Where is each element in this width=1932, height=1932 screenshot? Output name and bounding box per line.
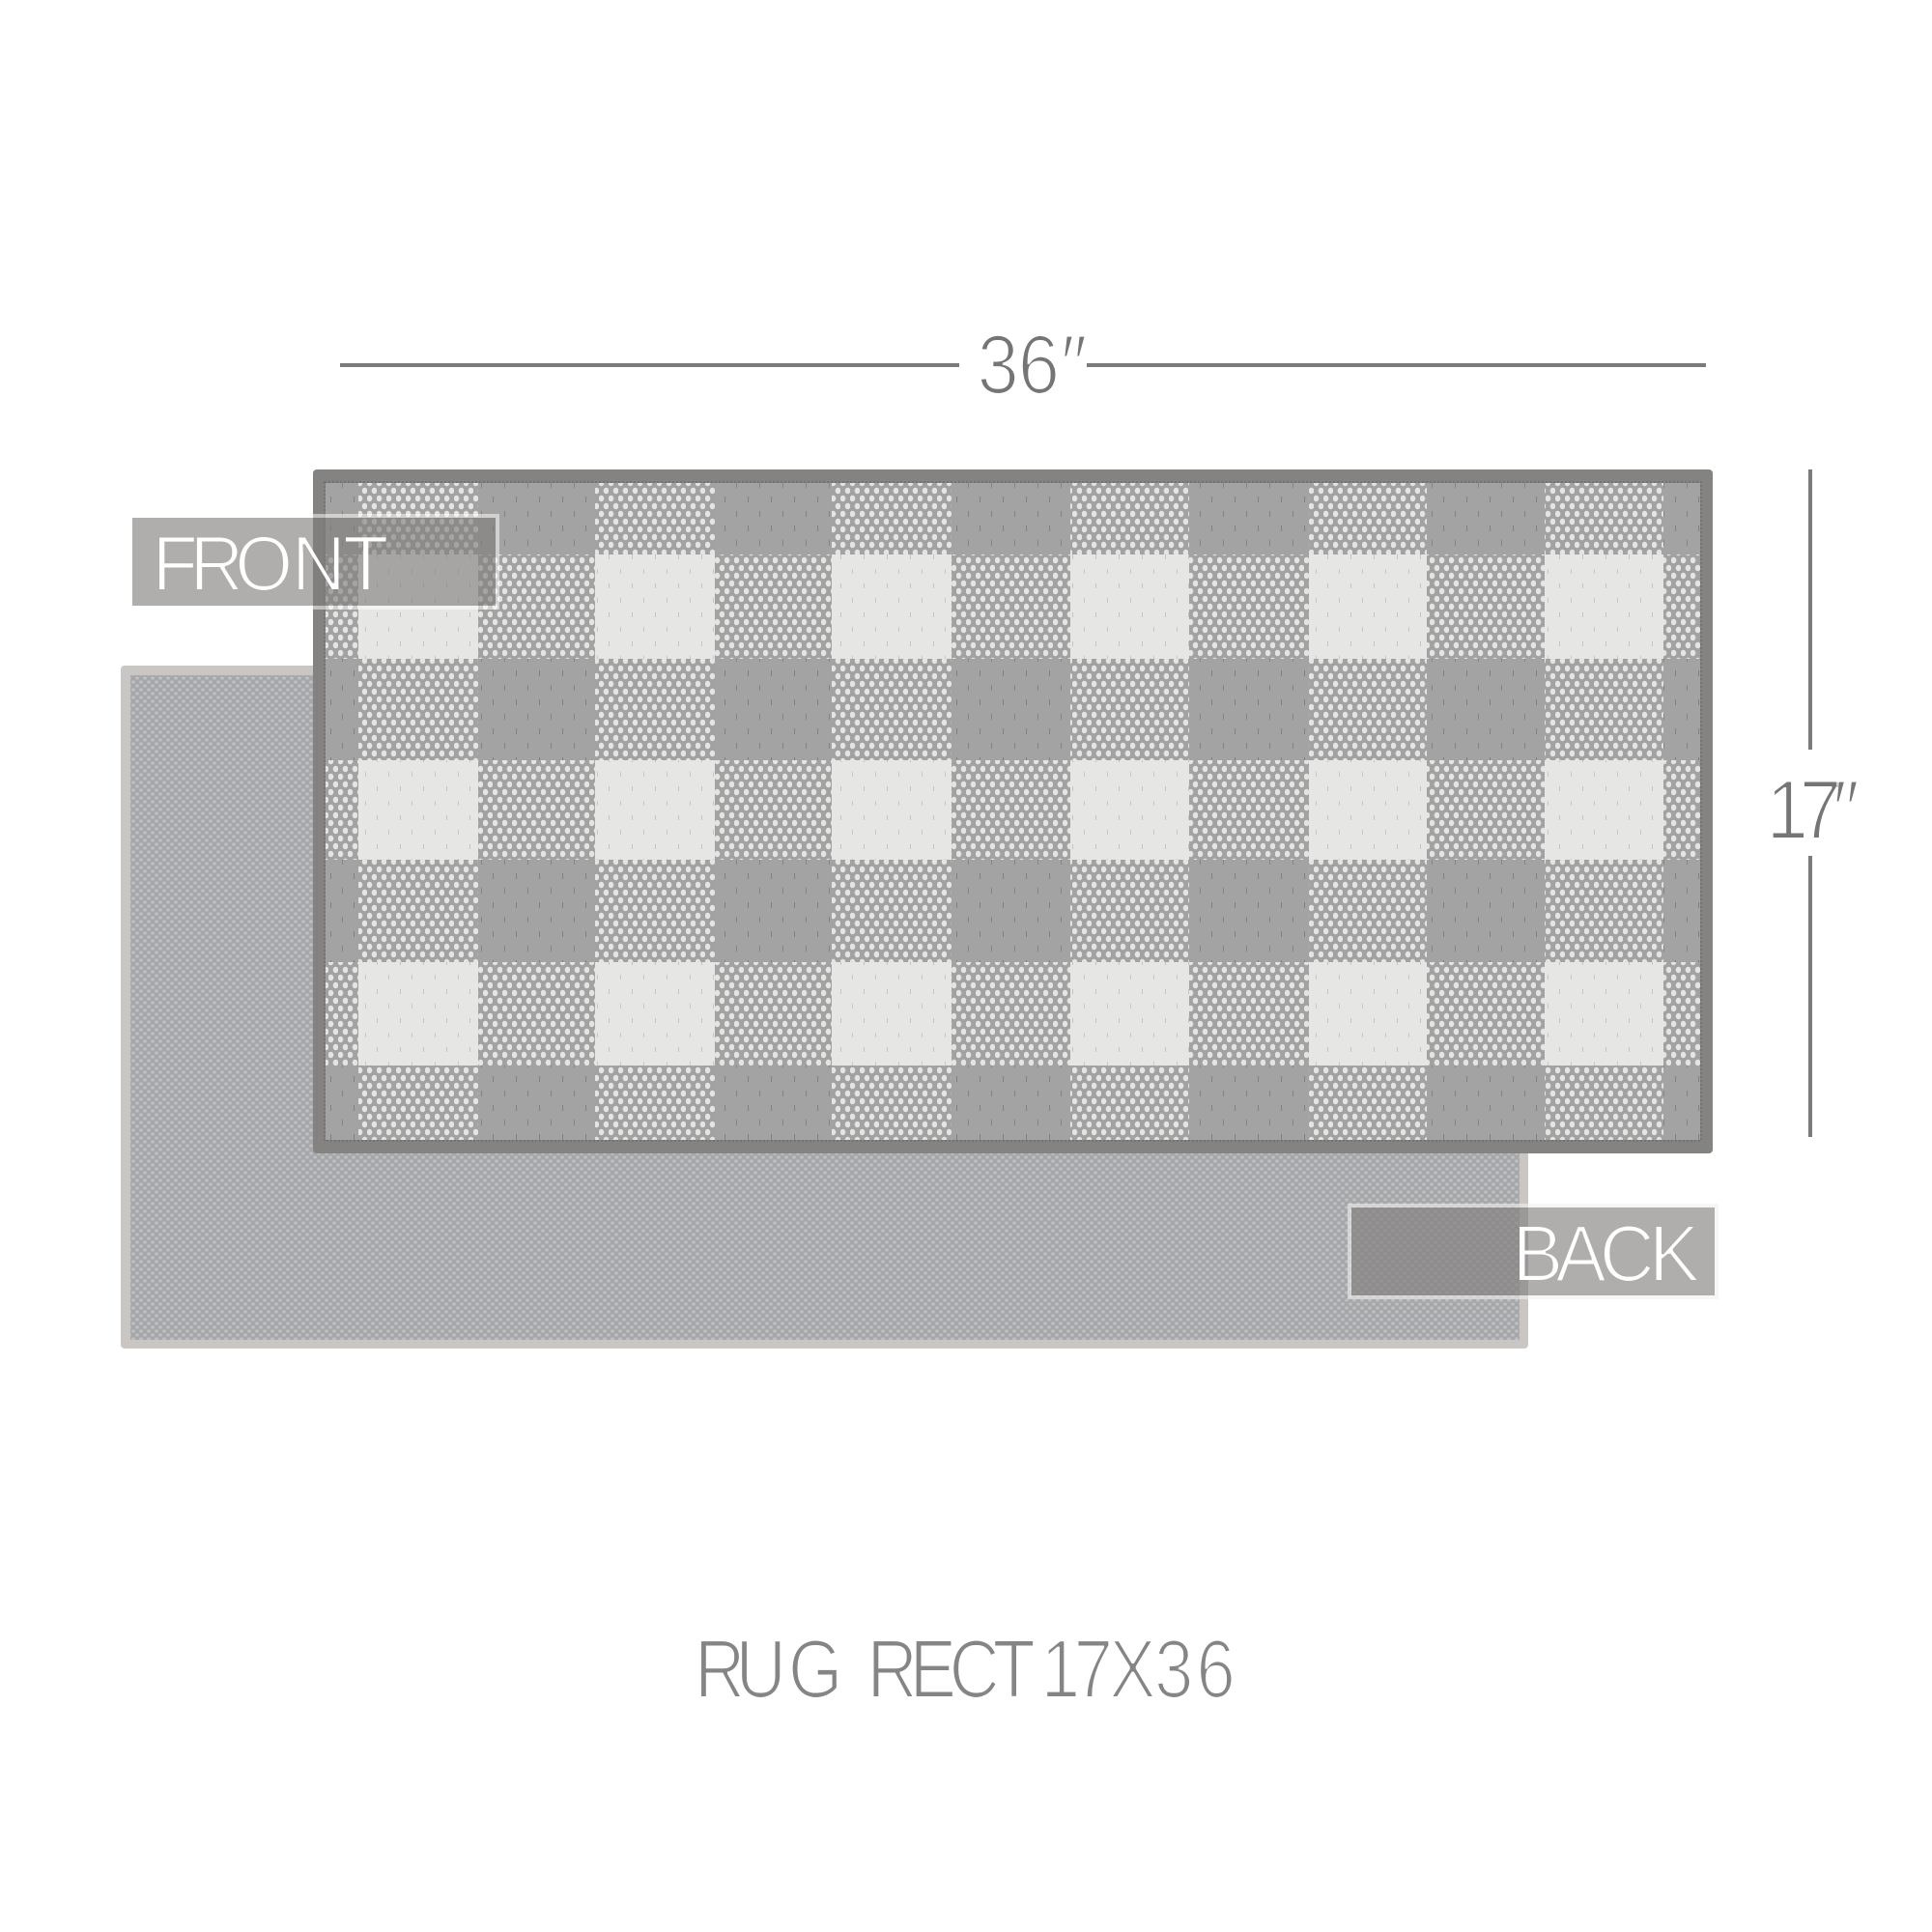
width line left [340,363,959,367]
label: front: FRONT [153,519,388,607]
height line bottom [1808,856,1812,1137]
front rug binding [313,469,1713,1153]
width dimension [340,319,1706,412]
label: back: BACK [1513,1209,1700,1298]
gingham white squares [358,554,1663,1065]
gingham solid grey squares [326,483,1700,1140]
height value: 17″ [1767,764,1860,857]
gingham dotted ground [326,483,1700,1140]
front rug [313,469,1713,1153]
width value: 36″ [978,319,1087,412]
back rug [121,666,1528,1349]
height dimension [1767,469,1860,1137]
width line right [1087,363,1706,367]
product title: RUG RECT 17X36 [695,1623,1236,1715]
label: back [1350,1206,1717,1298]
label: front [130,516,497,608]
height line top [1808,469,1812,750]
